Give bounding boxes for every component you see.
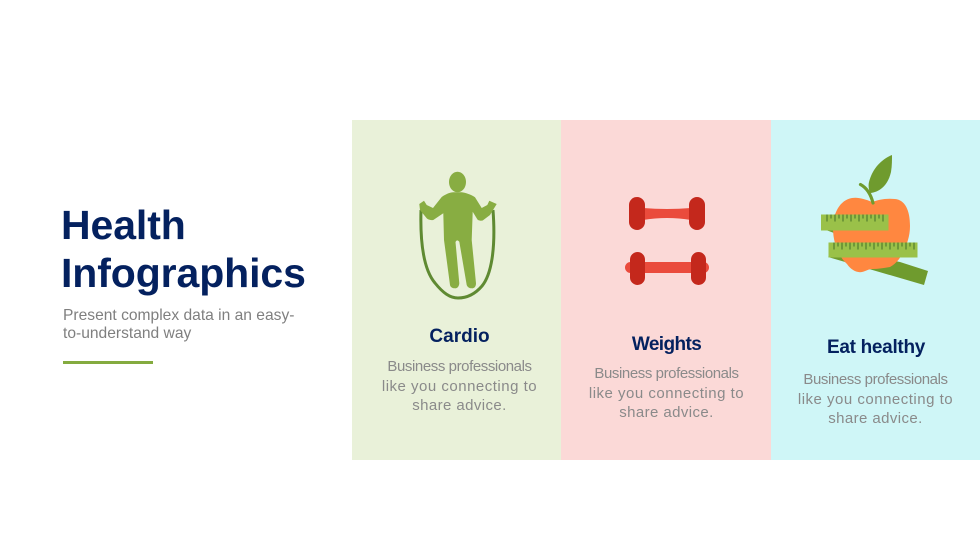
panel: eat healthy [771, 120, 980, 460]
subtitle: Present complex data in an easy- [63, 307, 294, 324]
subtitle: to-understand way [63, 325, 191, 342]
description: Eat healthy: like you connecting to [798, 390, 953, 408]
heading: Cardio: Cardio [429, 326, 490, 347]
heading block [61, 202, 306, 296]
title line 1: Health [61, 202, 186, 248]
description: Cardio: Business professionals [387, 358, 532, 375]
description: Weights [589, 365, 744, 421]
title line 2: Infographics [61, 250, 306, 296]
description: Eat healthy [798, 371, 953, 427]
panel: weights [561, 120, 771, 460]
panel: cardio [352, 120, 561, 460]
description: Eat healthy: share advice. [828, 410, 923, 427]
icon: apple with measuring tape [821, 155, 928, 285]
accent underline [63, 361, 153, 364]
description: Weights: like you connecting to [589, 384, 744, 402]
description: Eat healthy: Business professionals [803, 371, 948, 388]
heading: Weights: Weights [632, 334, 701, 355]
description: Weights: share advice. [619, 404, 714, 421]
description: Cardio [382, 358, 537, 414]
heading: Eat healthy: Eat healthy [827, 337, 925, 358]
description: Cardio: share advice. [412, 397, 507, 414]
icon: two dumbbells [625, 197, 709, 285]
subtitle [63, 307, 294, 342]
icon: person skipping rope [419, 172, 497, 300]
description: Weights: Business professionals [594, 365, 739, 382]
description: Cardio: like you connecting to [382, 378, 537, 394]
